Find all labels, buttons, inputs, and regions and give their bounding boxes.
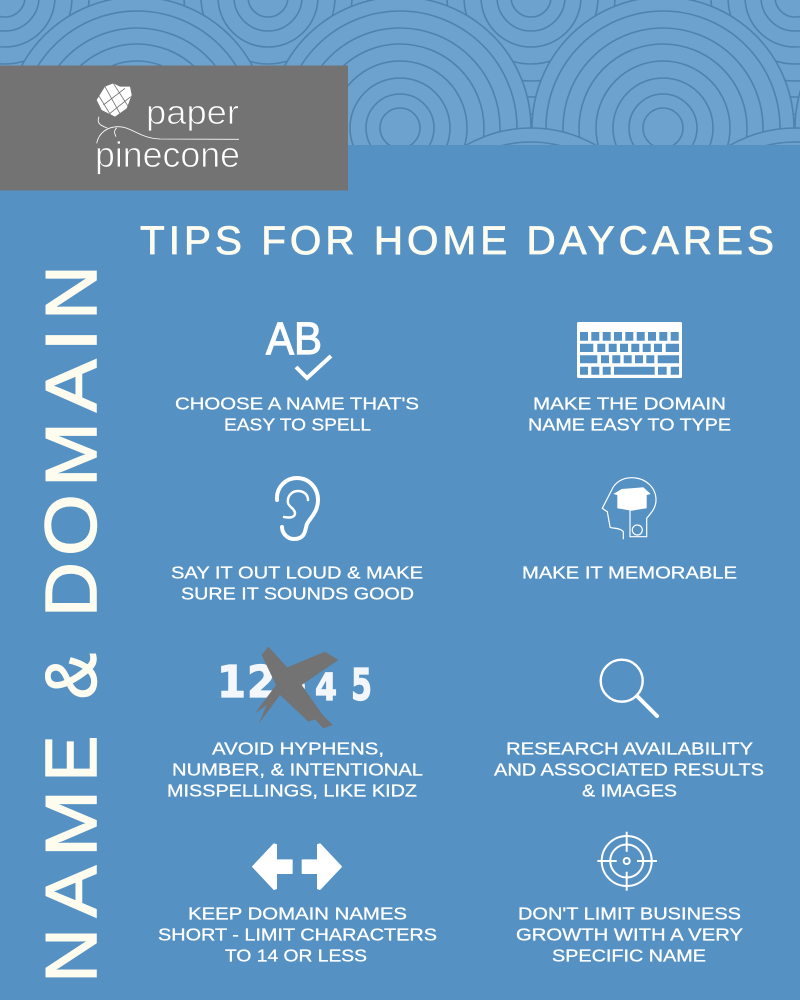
vertical title: name and domain: D [32, 562, 112, 617]
logo wordmark: paper: paper [146, 94, 239, 132]
icon: crossed out numbers: 5 [351, 660, 372, 711]
vertical title: name and domain: N [32, 928, 112, 983]
tip: research availability: AND ASSOCIATED RESULTS [494, 760, 764, 780]
vertical title: name and domain: M [32, 790, 112, 857]
tip: do not limit growth: SPECIFIC NAME [552, 946, 706, 966]
icon: head with graduation cap [602, 478, 656, 539]
header pattern of concentric arcs [0, 0, 800, 145]
icon: magnifying glass [601, 660, 657, 716]
vertical title: name and domain [32, 265, 112, 983]
tip: say it out loud: SURE IT SOUNDS GOOD [181, 584, 414, 604]
tip: easy to spell [175, 313, 419, 434]
tip: say it out loud [171, 478, 423, 604]
icon: target crosshair [597, 832, 657, 891]
tip: easy to spell: EASY TO SPELL [224, 414, 371, 434]
icon: pinecone [97, 83, 239, 143]
tip: memorable: MAKE IT MEMORABLE [522, 562, 737, 582]
icon: ear [277, 478, 318, 539]
tip: do not limit growth: GROWTH WITH A VERY [516, 924, 743, 944]
tip: avoid hyphens and numbers: MISSPELLINGS, LIKE KIDZ [167, 780, 417, 800]
vertical title: name and domain: & [32, 653, 112, 699]
vertical title: name and domain: I [32, 328, 112, 352]
vertical title: name and domain: O [32, 494, 112, 556]
tip: research availability: & IMAGES [582, 780, 677, 800]
tip: research availability: RESEARCH AVAILABILITY [506, 738, 753, 758]
tip: research availability [494, 660, 764, 800]
tip: keep domain short: TO 14 OR LESS [225, 946, 367, 966]
tip: easy to type [528, 322, 731, 434]
tip: avoid hyphens and numbers [167, 647, 423, 800]
icon: AB with check mark: AB [266, 313, 322, 364]
tip: keep domain short: KEEP DOMAIN NAMES [188, 904, 407, 924]
tip: memorable [522, 478, 737, 582]
vertical title: name and domain: N [32, 265, 112, 320]
tip: do not limit growth [516, 832, 743, 966]
tip: keep domain short: SHORT - LIMIT CHARACTERS [158, 924, 437, 944]
tip: easy to type: NAME EASY TO TYPE [528, 414, 731, 434]
logo panel [0, 66, 348, 190]
logo wordmark: pinecone: pinecone [95, 134, 240, 175]
icon: left and right arrows [253, 844, 341, 889]
vertical title: name and domain: A [32, 360, 112, 412]
tip: easy to spell: CHOOSE A NAME THAT'S [175, 394, 419, 414]
icon: crossed out numbers [217, 647, 372, 728]
icon: crossed out numbers: 4 [315, 666, 337, 709]
vertical title: name and domain: A [32, 866, 112, 917]
tip: keep domain short [158, 844, 437, 966]
heading: tips for home daycares: TIPS FOR HOME DAYCARES [140, 219, 778, 263]
icon: keyboard [577, 322, 682, 378]
tip: avoid hyphens and numbers: NUMBER, & INTENTIONAL [172, 760, 423, 780]
tip: do not limit growth: DON'T LIMIT BUSINESS [518, 904, 741, 924]
icon: crossed out numbers: 3 [284, 662, 307, 703]
tip: say it out loud: SAY IT OUT LOUD & MAKE [171, 562, 423, 582]
vertical title: name and domain: E [32, 736, 112, 781]
vertical title: name and domain: M [32, 422, 112, 487]
icon: crossed out numbers: 2 [247, 657, 276, 708]
icon: crossed out numbers: 1 [217, 657, 246, 708]
tip: avoid hyphens and numbers: AVOID HYPHENS, [212, 738, 384, 758]
tip: easy to type: MAKE THE DOMAIN [533, 394, 726, 414]
